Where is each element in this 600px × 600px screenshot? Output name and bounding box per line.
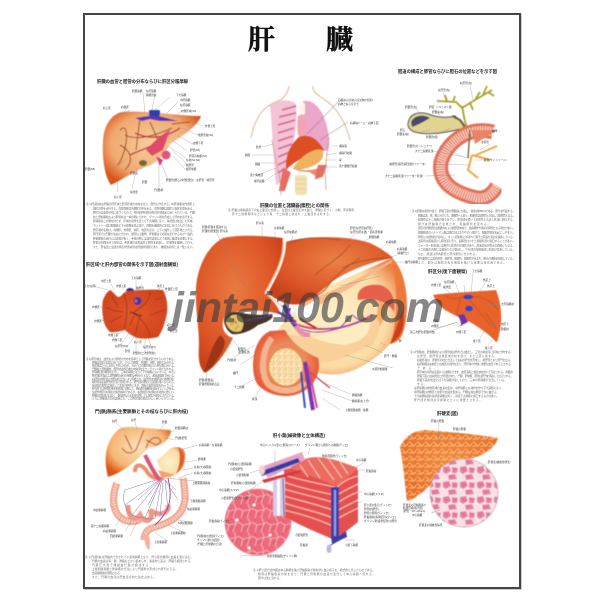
- text block: 肝区域の名称は、内側区、外側区、前区、後区のほか、上下に細分して亜区域とされる。: [93, 228, 195, 232]
- callout labels: 左肝静脈: [180, 103, 191, 107]
- gallbladder: [224, 312, 273, 334]
- text block: また、肝右葉と左葉の解剖学的境界は肝鎌状間膜であり、機能的境界とは一致しない。: [93, 245, 195, 249]
- callout labels: 胆嚢: [162, 420, 168, 424]
- callout labels: 胆管枝(二次胆管枝): [133, 351, 156, 355]
- callout labels: 内側上区: [116, 284, 127, 288]
- panel: cirrhosis: [400, 410, 511, 527]
- text block: 肝十二指腸靱帯などにより胃、十二指腸と結ばれ、上腹部を占有する。: [232, 212, 332, 216]
- callout labels: 尾状葉: [130, 190, 138, 194]
- title: 臓: [326, 25, 353, 55]
- panel: main liver and upper abdominal organs: [196, 202, 418, 412]
- callout labels: 幽門: [492, 129, 498, 133]
- callout labels: 左枝(S2,S3): [186, 158, 200, 162]
- callout labels: 後胆管: [136, 286, 144, 290]
- text block: [412, 209, 515, 265]
- callout labels: 胆管の周囲(ディッセ): [364, 511, 389, 515]
- callout labels: 右胃静脈: [397, 247, 408, 251]
- callout labels: 中心静脈: [356, 458, 367, 462]
- callout labels: 脾静脈(左上行): [352, 399, 369, 403]
- panel: posterior view of liver: [410, 268, 514, 402]
- text block: 各区域はさらに上区と下区に分かれ、合計八つの亜区域となり肝切除に用いる。: [92, 364, 176, 368]
- callout labels: 上腸間膜動脈・静脈: [345, 408, 369, 412]
- callout labels: (総胆管)膵管(膵頭部)(ファータ): [389, 162, 425, 166]
- callout labels: 肝硬変の線維性隔壁: [419, 523, 443, 527]
- text block: 注 1)胆嚢は梨状の袋で、肝臓下面の胆嚢窩に付着し、容量は約50mlである。胆汁を貯蔵する。: [412, 209, 515, 213]
- callout labels: 胆嚢管(胆石の好発部位)・左肝管・総肝管: [166, 178, 215, 182]
- stomach illustration: [135, 447, 185, 480]
- callout labels: 内区下: [501, 322, 509, 326]
- panel: biliary tract: [385, 68, 515, 265]
- callout labels: 左肝管(左): [438, 88, 450, 92]
- text block: 十二指腸の内腔には輪状ひだが発達し、下行部の内側後壁に乳頭が位置している。: [418, 248, 515, 252]
- heading: 肝臓の血管と胆管の分布ならびに肝区分服摩線: [97, 78, 189, 85]
- text block: 肝動脈枝の走行には変異が多く、手術の際には血管造影などで事前に確認を必要とする。: [93, 236, 195, 240]
- callout labels: 下大静脈: [472, 269, 483, 273]
- callout labels: 肝鎌状(胆嚢管) 肝円索: [202, 229, 228, 233]
- text block: 注:肝臓は横隔膜直下の右上腹部に位置し、左葉は上腹部正中を越え、脾臓に近づく。小網、肝胃靱帯、: [228, 208, 357, 212]
- callout labels: 中肝静脈: [180, 98, 191, 102]
- text block: さらに肝腫瘍の局在診断にも、この肝区域の概念が広く用いられている。: [92, 397, 176, 401]
- callout labels: (門脈と肝動脈の合流): [197, 542, 222, 546]
- text block: 注 1)門(脈)枝、肝動脈枝および胆管枝は肝内では並走し、三管の枝は同じ区域に分布する。: [410, 350, 513, 354]
- callout labels: 横行結腸: [254, 179, 265, 183]
- torso illustration: [251, 86, 350, 195]
- text block: ファーター乳頭部には胆管と膵管の共通管があり、膵液逆流が膵炎の原因にもなる。: [418, 243, 515, 247]
- heading: 肝区分(後下面観察): [428, 268, 468, 275]
- callout labels: グリソン鞘から類洞への動脈(ティエ): [305, 443, 348, 447]
- callout labels: 胆嚢底(右): [432, 110, 444, 114]
- text block: 左肝静脈は外側区域の血液を集め、中肝静脈と共通幹を作り下大静脈に注ぐ。: [414, 386, 504, 390]
- callout labels: 門(脈)胆管: [175, 436, 188, 440]
- callout labels: 尾状葉: [443, 285, 451, 289]
- text block: 類洞は肝細胞索の間を走り、門脈と肝動脈の血液が混合して中心静脈へ流れる。: [258, 572, 375, 576]
- callout labels: 後下区: [485, 346, 493, 350]
- callout labels: 胆嚢(胆嚢窩): [199, 378, 214, 382]
- text block: 前区の間を走行する。左肝静脈は外側区の中を走る。右肝静脈は前区と後区の間を走る。: [93, 206, 195, 210]
- callout labels: 大肝静脈枝: [501, 302, 514, 306]
- callout labels: 胆管(左肝管右肝管): [350, 226, 373, 230]
- text block: 右肝管は前区枝と後区枝の合流により形成され、左肝管は内側区枝と外側区枝。: [92, 377, 176, 381]
- text block: 肝静脈は区域間を走行し、三本の静脈となって下大静脈に注いでいる。ゆえに: [92, 370, 176, 374]
- callout labels: 幽門前静脈: [405, 260, 418, 264]
- callout labels: 胃: [339, 158, 342, 162]
- text block: 胆石の好発部位は胆嚢内および総胆管末端で、疼痛発作や黄疸の原因となる場合が多い。: [418, 226, 515, 230]
- text block: 門脈圧亢進で側副血行路が発達する。: [92, 563, 152, 567]
- text block: [410, 350, 513, 402]
- callout labels: 右後区: [121, 105, 129, 109]
- callout labels: 後下区: [473, 339, 481, 343]
- callout labels: 小葉間動脈: [236, 473, 249, 477]
- text block: 中肝静脈は内側区と前区の血液を集める。門脈左枝は臍部で急に曲がる。: [414, 390, 499, 394]
- callout labels: 肋骨: [256, 145, 262, 149]
- text block: する。: [417, 382, 427, 386]
- callout labels: 十二指腸: [234, 385, 245, 389]
- text block: 尾状葉の胆管は独立して左右の肝管に注ぎ、固有の血管支配を持っている。: [92, 383, 176, 387]
- liver lobes illustration: [196, 236, 393, 373]
- callout labels: 左肝管(S4): [115, 344, 128, 348]
- callout labels: 左肝静脈: [146, 89, 157, 93]
- callout labels: 外区上: [487, 284, 495, 288]
- callout labels: 幽門: [233, 371, 239, 375]
- text block: 右後区枝は、肝前区の枝と合流して左右の肝管を形成し、総肝管となり肝門を出る。: [417, 358, 513, 362]
- callout labels: ハルトマン嚢: [436, 105, 452, 109]
- callout labels: 第十腰椎肝結腸: [339, 164, 358, 168]
- callout labels: 中結腸静脈: [93, 508, 106, 512]
- callout labels: 下大静脈: [176, 93, 187, 97]
- hepatic portal vessels: [278, 298, 372, 335]
- callout labels: [85, 89, 216, 199]
- callout labels: 類洞周囲腔(ディッセ): [322, 454, 347, 458]
- callout labels: 左結腸静脈: [187, 507, 200, 511]
- callout labels: 総胆管: [186, 163, 194, 167]
- callout labels: 脾: [399, 339, 402, 343]
- text block: 肝外胆管には左右肝管、総肝管、胆嚢管、総胆管が含まれ、胆汁の通路を形成している。: [418, 256, 515, 260]
- text block: 肝門部では門脈が左右に分かれ、胆管は上腹側、肝動脈はその間を走行するのが一般的。: [93, 232, 195, 236]
- callout labels: 胆嚢窩: [130, 171, 138, 175]
- heading: 胆道の構成と膵管ならびに胆石の位置などを示す図: [398, 68, 498, 75]
- callout labels: 肝鎌状間膜結石症: [199, 382, 220, 386]
- callout labels: 下大静脈: [131, 276, 142, 280]
- callout labels: 上腸間膜静脈枝: [192, 481, 211, 485]
- callout labels: 胆嚢管(左): [426, 135, 438, 139]
- callout labels: 右結腸静脈: [103, 529, 116, 533]
- callout labels: 右胃静脈・左胃静脈: [199, 443, 223, 447]
- callout labels: 内側下区: [112, 338, 123, 342]
- callout labels: 大十二指腸乳頭(ファーター乳頭): [385, 174, 423, 178]
- callout labels: 左肝静脈: [444, 280, 455, 284]
- callout labels: 肝動脈枝(小葉間動脈): [231, 481, 256, 485]
- text block: 枝と肝動脈枝および胆管枝は一本の鞘に包まれ、グリソン鞘を形成して肝内を走行する。: [93, 215, 195, 219]
- posterior liver illustration: [433, 290, 501, 342]
- callout labels: 大十二指腸乳頭: [415, 149, 434, 153]
- callout labels: 胆嚢(肝臓を貫通する): [202, 225, 227, 229]
- text block: 肝区域の境界は表面からは観察できず、血管造影と超音波を用いて同定される。膵臓の: [417, 370, 513, 374]
- callout labels: 左胃動脈: [274, 226, 285, 230]
- text block: 肝臓下面の後部には下大静脈が接しており、三本の肝静脈が合流している。: [417, 378, 507, 382]
- callout labels: 中心静脈(スキマ): [364, 492, 384, 496]
- callout labels: 右下区: [134, 340, 142, 344]
- callout labels: 外区上: [483, 278, 491, 282]
- callout labels: 上直腸静脈: [154, 540, 167, 544]
- text block: また、門脈の血流は肝血流の約七割を占める。: [92, 575, 156, 579]
- text block: [86, 357, 176, 401]
- callout labels: 小葉間胆管: [295, 533, 308, 537]
- title: 肝: [248, 25, 275, 55]
- callout labels: 結節形成(偽小葉): [403, 506, 423, 510]
- callout labels: 後胆管枝(S2): [198, 133, 213, 137]
- biliary illustration: [408, 86, 497, 198]
- callout labels: [91, 418, 223, 544]
- callout labels: 肝硬変の肝細胞索(*: [403, 503, 426, 507]
- text block: 注 1)肝小葉の立体図は中心静脈を軸に肝細胞索が放射状に並ぶ様子を、模式的に示したものである。: [253, 568, 375, 572]
- text block: 左葉外側区の切除は比較的容易であるが、右葉後区の切除は手技的に難しい。: [92, 390, 176, 394]
- text block: [85, 555, 193, 579]
- callout labels: 胆嚢静脈: [369, 235, 380, 239]
- text block: なお、胆道は肝内胆管と肝外胆管に分かれる。: [418, 252, 478, 256]
- callout labels: 肝細胞索: [366, 469, 377, 473]
- callout labels: 横隔行結腸: [339, 151, 352, 155]
- text block: 肝臓の再生能力は高く、健常肝なら七割を切除しても再生が可能とされている。: [92, 393, 176, 397]
- text block: 肝区域の同定には肝静脈の走行が重要な手掛かりとなり、超音波検査で用いる。: [92, 374, 176, 378]
- text block: 肝門部の解剖は手術時にとくに重要とされる。: [414, 398, 482, 402]
- callout labels: 中心静脈(スキマ): [219, 488, 239, 492]
- callout labels: 門(脈)枝(小葉間静脈): [228, 462, 252, 466]
- callout labels: [385, 81, 507, 178]
- text block: カントリー線は胆嚢窩と下大静脈を結ぶ線で、肝臓を機能的に左右に分けるものである。: [93, 224, 195, 228]
- callout labels: 小葉間胆管(グリソン鞘): [221, 496, 249, 500]
- callout labels: (胆管・10〜20mm): [403, 509, 425, 513]
- callout labels: 肝臓の胆嚢: [453, 427, 466, 431]
- text block: 胆汁は肝細胞で生成され、毛細胆管を流れる。: [418, 222, 490, 226]
- text block: [253, 568, 375, 580]
- duodenum and pancreas head: [253, 330, 319, 396]
- callout labels: 左肝: [131, 418, 137, 422]
- callout labels: 類洞周囲細胞(グリソン鞘): [267, 554, 297, 558]
- callout labels: 大膵管動脈群: [372, 367, 388, 371]
- text block: 注 1)門(脈)枝は肝臓の肝区域と肝亜区域の中央を走り、胆管も伴走する。中肝静脈は内側区と: [86, 202, 195, 206]
- callout labels: 肝細胞索(索状配列)(ティエ): [364, 515, 396, 519]
- callout labels: 内側下区: [456, 330, 467, 334]
- magnified cirrhosis tissue: [430, 459, 498, 527]
- callout labels: 肝門・脾臓: [384, 354, 397, 358]
- callout labels: 横隔膜: [339, 144, 347, 148]
- text block: 肝臓下面には尾状葉と方形葉があり、門脈、肝動脈、胆管は肝門を通過して出入りする。: [417, 374, 513, 378]
- callout labels: 肝小葉の集合(ディッセ): [364, 503, 392, 507]
- text block: 肝臓は左葉と右葉に分けられ、さらに内側区、外側区、前区、後区に分かれる。: [92, 360, 176, 364]
- panel: vessels and bile ducts of liver: [85, 78, 216, 249]
- callout labels: 胆管: [125, 349, 131, 353]
- text block: 注 1)門(脈)枝は肝臓内で分かれて小葉間静脈となり、肝小葉の類洞に血液を運び込む。: [85, 555, 193, 559]
- text block: 左肝管、総肝管は後区域の枝を受け、また上区に達する。: [417, 354, 497, 358]
- callout labels: 内側区域(S4): [181, 109, 196, 113]
- callout labels: [403, 419, 511, 527]
- callout labels: 左肝動脈枝: [284, 230, 297, 234]
- callout labels: 内側下区: [108, 333, 119, 337]
- callout labels: 胆嚢管: [238, 347, 246, 351]
- portal vessel fan: [124, 478, 178, 525]
- lobule block illustration: [259, 452, 358, 553]
- callout labels: グリソン鞘(小葉間): [197, 538, 220, 542]
- callout labels: 右上区: [167, 323, 175, 327]
- callout labels: 第三次胆管(胆嚢内枝): [410, 330, 435, 334]
- callout labels: 胆嚢(S5): [85, 167, 95, 171]
- callout labels: 第十二指腸静脈: [91, 524, 110, 528]
- callout labels: 内側下区: [193, 141, 204, 145]
- cirrhotic liver illustration: [400, 430, 498, 501]
- text block: 注 1)肝区域は、血管および胆管の分布を基準として肝臓を区分するものである。: [86, 357, 176, 361]
- title: [248, 25, 353, 55]
- callout labels: 右横隔ドーム・右肺下面: [350, 121, 379, 125]
- callout labels: 右肝管(左): [460, 81, 472, 85]
- text block: [86, 202, 195, 249]
- callout labels: [84, 276, 178, 355]
- text block: 肝外科では各亜区域を系統的に切除して、残存肝の機能を温存することがある。: [92, 387, 176, 391]
- callout labels: 胆嚢: [142, 180, 148, 184]
- callout labels: 胆嚢底(右): [397, 132, 409, 136]
- text block: 上腸間膜静脈と脾静脈の合流により門脈幹が形成され肝門に入る。: [92, 567, 178, 571]
- panel: hepatic lobule: [197, 432, 397, 580]
- callout labels: [245, 98, 379, 183]
- callout labels: 右肝: [112, 419, 118, 423]
- callout labels: 胸膜: [245, 153, 251, 157]
- callout labels: 左肝管(S1): [143, 345, 156, 349]
- text block: 肝静脈はこの鞘を持たず、区域の境界を走って下大静脈に注ぐ。尾状葉は独立した区域。: [93, 219, 195, 223]
- callout labels: 主膵管: [481, 140, 489, 144]
- heading: 肝区域*と肝内部管の関係を示す図(還射面観察): [86, 261, 179, 268]
- stomach and spleen illustration: [277, 258, 407, 375]
- liver illustration: [106, 427, 171, 477]
- callout labels: 右上区: [103, 106, 111, 110]
- callout labels: 脾静脈: [198, 457, 206, 461]
- callout labels: 静脈管索: [146, 93, 157, 97]
- callout labels: 胆管: [429, 105, 435, 109]
- callout labels: 内側上区: [431, 283, 442, 287]
- text block: 右肝静脈は右前区と右後区の境界を走り、肝区域の分類に重要な血管であるとされる。: [417, 362, 513, 366]
- text block: [228, 208, 357, 216]
- callout labels: 総肝動脈: [186, 167, 197, 171]
- liver illustration: [103, 110, 201, 185]
- callout labels: 外側上区: [205, 124, 216, 128]
- heading: 門(脈)脈系(主要脈脈とその枝ならびに肝内枝): [95, 408, 189, 415]
- callout labels: 右胃動脈: [386, 240, 397, 244]
- text block: 門脈枝と肝動脈枝、胆管枝は各区域の中央部を走り、グリソン鞘で包まれる。: [92, 367, 176, 371]
- text block: 主膵管は膵尾部から膵頭部に至り、副膵管は小十二指腸乳頭に開口することが多い。: [418, 239, 515, 243]
- callout labels: 膵頭: [252, 397, 258, 401]
- callout labels: [410, 269, 514, 350]
- text block: 食道静脈瘤の原因となる。: [92, 571, 122, 575]
- callout labels: 胆石: [400, 128, 406, 132]
- text block: 下大静脈後面の尾状葉静脈は短く、直接下大静脈に開口するものが多い。: [414, 394, 499, 398]
- callout labels: [199, 221, 418, 412]
- callout labels: 胆嚢管(オッシュナー): [407, 144, 432, 148]
- text block: 胆嚢頚部のハルトマン嚢は胆石がはまりやすい部位で、胆嚢管閉塞を起こしやすい。: [418, 230, 515, 234]
- callout labels: 脾臓静脈: [352, 393, 363, 397]
- callout labels: 外側区上区: [165, 287, 178, 291]
- panel: hepatic segments and internal ducts: [84, 261, 179, 401]
- callout labels: 第十胸椎部: [250, 173, 263, 177]
- callout labels: 小葉下静脈: [345, 543, 358, 547]
- callout labels: 胸腹: [255, 162, 261, 166]
- callout labels: 肝細胞: [300, 543, 308, 547]
- callout labels: 心臓(右心房右心室)(肺の位置): [338, 98, 373, 102]
- callout labels: 胆嚢管(左): [405, 105, 417, 109]
- callout labels: 内側区: [92, 305, 100, 309]
- callout labels: 門(脈)幹: [154, 188, 164, 192]
- callout labels: 門(脈)枝の類洞(ティエ): [197, 534, 224, 538]
- callout labels: 右下区: [114, 195, 122, 199]
- callout labels: 門(脈)幹: [227, 358, 237, 362]
- lobule cross-section circle: [225, 489, 291, 555]
- text block: また、胆汁は脂肪の乳化吸収を助ける重要な消化液である。: [418, 261, 506, 265]
- callout labels: (胃幽門上): [397, 251, 409, 255]
- callout labels: 胆管枝(胆管): [364, 507, 379, 511]
- callout labels: 門脈: [433, 319, 439, 323]
- callout labels: 内側区: [431, 324, 439, 328]
- text block: 肝葉の切除を行う場合は、各区域の支配血管と胆管を結紮し、区域間を離断して行う。: [93, 241, 195, 245]
- callout labels: 左胃(大)静脈枝: [194, 465, 212, 469]
- poster frame: [84, 14, 521, 589]
- callout labels: 胆嚢枝: [501, 327, 509, 331]
- callout labels: 右上区: [170, 329, 178, 333]
- callout labels: [197, 443, 397, 558]
- callout labels: 右胃(大)静脈枝: [194, 471, 212, 475]
- watermark: jintai100.com: [167, 284, 444, 332]
- segment liver illustration: [102, 288, 167, 339]
- callout labels: 左肝管(肝左葉)・固有肝動脈: [350, 230, 383, 234]
- text block: である。: [417, 366, 437, 370]
- colon illustration: [114, 478, 185, 550]
- callout labels: 内側区: [94, 319, 102, 323]
- callout labels: 回結腸静脈: [110, 534, 123, 538]
- callout labels: S状結腸静脈: [178, 521, 193, 525]
- callout labels: 下大(左肝): [84, 284, 96, 288]
- callout labels: 胆嚢静脈: [132, 89, 143, 93]
- panel: thorax and abdomen position: [245, 86, 379, 195]
- text block: 総肝管は左右肝管の合流で形成される。肝門部の胆管には変異が多く見られる。: [92, 380, 176, 384]
- callout labels: 肝硬変(線維性増生): [488, 460, 511, 464]
- callout labels: 胆管(S3): [190, 148, 200, 152]
- callout labels: 肝円索: [256, 221, 264, 225]
- callout labels: 肝細胞索(ティエ): [209, 519, 229, 523]
- callout labels: 中心(ヘリカル管)と類洞(スペース): [260, 443, 300, 447]
- panel: portal vein system: [85, 408, 223, 579]
- callout labels: 小葉間胆管: [230, 467, 243, 471]
- callout labels: 下腸間膜静脈: [190, 499, 206, 503]
- callout labels: 膵管(サントリーニ): [484, 158, 507, 162]
- callout labels: 胆嚢静脈枝: [175, 426, 188, 430]
- text block: 胆汁は逆に流れる。: [258, 576, 282, 580]
- callout labels: 外区上: [157, 284, 165, 288]
- callout labels: グリソン鞘(索状配列)の胆管: [364, 519, 397, 523]
- abdominal aorta and vena cava: [301, 362, 330, 410]
- callout labels: 中心静脈: [412, 513, 423, 517]
- heading: 肝臓の位置と諸臓器(腹腔)との関係: [260, 202, 330, 209]
- text block: 門脈の血液は胃、腸、脾臓などから集められ、栄養分に富み、肝臓で処理される。: [92, 559, 193, 563]
- callout labels: 右肺と右心室まで: [338, 102, 359, 106]
- text block: 肝区分は血管分布に基づくもので、外科的肝切除の際の区域設定に用いられている。門脈: [93, 211, 195, 215]
- callout labels: 肝固有動脈(S1): [189, 154, 207, 158]
- callout labels: (胆嚢底部): [238, 350, 250, 354]
- heading: 肝硬変(図): [437, 410, 459, 417]
- heading: 肝小葉(細微像と立体構造): [273, 432, 326, 439]
- text block: 胆管には括約筋が存在し、オッジ括約筋と呼ばれて胆汁と膵液の流出を調節している。: [418, 235, 515, 239]
- text block: 胆嚢は底、体、頚に分けられ、胆嚢管へと続く。胆嚢管は総肝管と合流して総胆管となる。: [418, 213, 515, 217]
- callout labels: 中肝上区: [101, 279, 112, 283]
- callout labels: 上直腸静脈枝: [170, 531, 186, 535]
- callout labels: 肝臓の胆嚢: [431, 419, 444, 423]
- text block: 総胆管は十二指腸の後ろを下り、膵頭部を貫いて主膵管と合流し乳頭に開口する。: [418, 218, 515, 222]
